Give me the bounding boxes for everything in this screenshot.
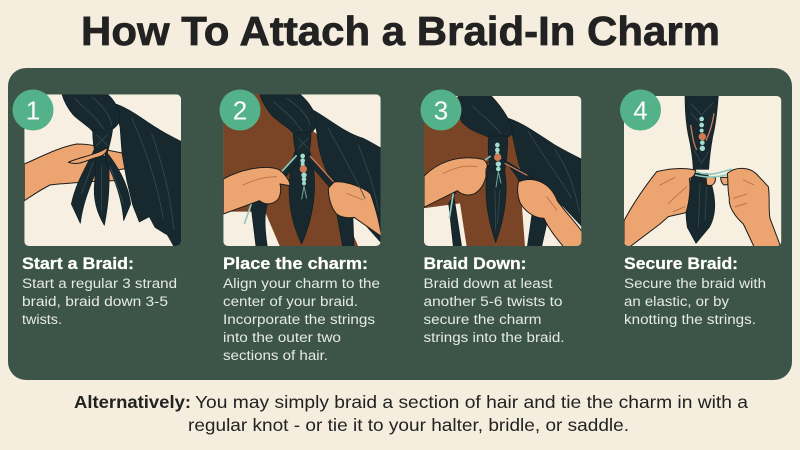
step 1 text: twists. [22,312,62,327]
step 1 text: Start a Braid: [22,255,134,273]
step 3 number badge: 3 [434,96,448,126]
step 2 text: center of your braid. [223,294,358,309]
step 1 text [22,255,177,327]
step 4 text: Secure Braid: [624,255,738,273]
step 4 illustration [624,95,781,247]
step 3 text: secure the charm [424,312,542,327]
step 2 text: Place the charm: [223,255,368,273]
step 2 text: into the outer two [223,330,341,345]
step 4 number badge: 4 [633,96,648,126]
step 4 number badge [620,90,661,130]
footer note: regular knot - or tie it to your halter, bridle, or saddle. [188,415,629,435]
step 1 illustration [24,93,182,247]
step 4 text: an elastic, or by [624,294,729,309]
panel: steps [8,68,792,380]
step 2 text: Align your charm to the [223,276,380,291]
footer note: Alternatively: [74,392,191,412]
step 3 text [424,255,564,345]
step 4 text: Secure the braid with [624,276,766,291]
step 1 number badge: 1 [26,96,40,126]
step 1 number badge [12,90,54,130]
step 3 text: Braid down at least [424,276,553,291]
step 3 number badge [420,90,462,130]
step 3 text: strings into the braid. [424,330,564,345]
step 2 text: sections of hair. [223,348,328,363]
step 3 text: Braid Down: [424,255,526,273]
footer note: You may simply braid a section of hair and tie the charm in with a [195,392,748,412]
step 4 text [624,255,766,327]
step 2 text: Incorporate the strings [223,312,375,327]
step 1 text: braid, braid down 3-5 [22,294,168,309]
step 2 number badge [220,90,260,130]
step 2 illustration [223,93,382,247]
step 2 text [223,255,380,363]
step 1 text: Start a regular 3 strand [22,276,177,291]
step 2 number badge: 2 [233,96,247,126]
step 4 text: knotting the strings. [624,312,756,327]
footer note [74,392,748,435]
step 3 text: another 5-6 twists to [424,294,562,309]
title: How To Attach a Braid-In Charm [81,8,720,54]
step 3 illustration [423,95,582,247]
